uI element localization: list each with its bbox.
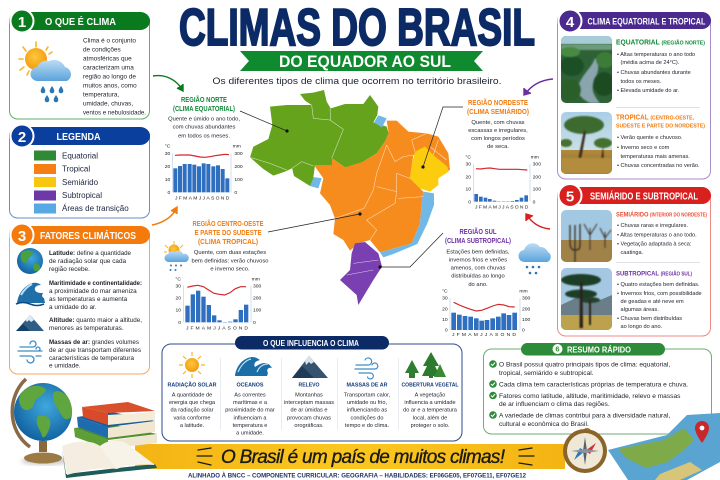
region: centro-oeste: e inverno seco. bbox=[210, 266, 250, 272]
chart: norte: 300 bbox=[234, 151, 243, 157]
checklist: de ar influenciam o clima das regiões. bbox=[499, 401, 610, 408]
column: massas de ar: Transportam calor, bbox=[344, 392, 391, 398]
region: sul bbox=[445, 227, 511, 288]
region: centro-oeste: (CLIMA TROPICAL) bbox=[198, 239, 258, 246]
column: oceanos: marítimas e a bbox=[233, 400, 268, 406]
region: norte: (CLIMA EQUATORIAL) bbox=[173, 106, 235, 113]
column: cobertura vegetal: influencia a umidade bbox=[404, 400, 456, 406]
icon: wave bbox=[16, 283, 45, 306]
panel 3: fatores climáticos: FATORES CLIMÁTICOS bbox=[40, 229, 136, 242]
chart: centro-oeste: 30 bbox=[175, 284, 181, 290]
region: sul: distribuídas ao longo bbox=[451, 274, 505, 280]
text: fatores: a proximidade do mar ameniza bbox=[49, 288, 137, 295]
chart: norte: 0 bbox=[168, 190, 171, 196]
chart: sul: °C bbox=[442, 289, 448, 295]
column: relevo: provocam chuvas bbox=[287, 415, 331, 421]
chart: norte: 10 bbox=[165, 177, 171, 183]
text: fatores: Maritimidade e continentalidade: bbox=[49, 280, 142, 287]
photo: caatinga bbox=[561, 210, 612, 262]
compass bbox=[563, 428, 607, 473]
chart: centro-oeste: mm bbox=[252, 276, 260, 282]
region: centro-oeste: E PARTE DO SUDESTE bbox=[194, 230, 262, 237]
text: equatorial: EQUATORIAL (REGIÃO NORTE) bbox=[616, 38, 705, 46]
chart: sul: 0 bbox=[445, 328, 448, 334]
chart: nordeste: 100 bbox=[533, 187, 541, 193]
panel 3: fatores climáticos: 3 bbox=[18, 228, 26, 245]
column: massas de ar bbox=[344, 358, 391, 429]
text: fatores: de radiação solar que cada bbox=[49, 258, 127, 265]
column: oceanos bbox=[225, 357, 275, 437]
photo: rainforest river bbox=[559, 36, 615, 103]
text: fatores: e umidade. bbox=[49, 362, 81, 370]
arrow: purple bbox=[524, 79, 553, 95]
chart: nordeste: mm bbox=[531, 154, 539, 160]
column: oceanos: influenciam a bbox=[234, 415, 267, 421]
region: norte: em todos os meses. bbox=[178, 133, 230, 139]
column: relevo: RELEVO bbox=[298, 382, 320, 388]
panel 1: o que é clima bbox=[10, 10, 150, 119]
chart: norte: mm bbox=[233, 143, 241, 149]
column: oceanos: temperatura e bbox=[233, 423, 267, 429]
text: tropical: SUDESTE E PARTE DO NORDESTE) bbox=[616, 123, 705, 129]
icon: sun and rain cloud bbox=[164, 241, 189, 271]
region: norte bbox=[168, 95, 240, 139]
text: fatores: Latitude: define a quantidade bbox=[49, 250, 131, 257]
region: sul: Estações bem definidas, bbox=[446, 250, 510, 256]
column: massas de ar: influenciando as bbox=[347, 408, 387, 414]
yellow banner bbox=[135, 444, 565, 469]
chart: nordeste bbox=[465, 154, 541, 211]
column: radiação solar bbox=[168, 352, 216, 429]
legend items: Tropical bbox=[62, 164, 90, 174]
panel: o que influencia o clima bbox=[162, 336, 462, 441]
panel 5: semiárido e subtropical bbox=[558, 184, 711, 336]
column: radiação solar: da radiação solar bbox=[171, 408, 214, 414]
panel 1: o que é clima: O QUE É CLIMA bbox=[45, 15, 116, 28]
text: equatorial: • Chuvas abundantes durante bbox=[617, 70, 691, 76]
arrow: orange bbox=[152, 207, 177, 225]
column: massas de ar: tempo e do clima. bbox=[345, 423, 390, 429]
text: subtropical: • Invernos frios, com possibilidade bbox=[617, 291, 702, 297]
column: relevo: de ar úmidas e bbox=[290, 408, 328, 414]
icon: rain cloud bbox=[518, 243, 551, 274]
text: subtropical: de geadas e até neve em bbox=[620, 299, 684, 305]
icon: wind bbox=[18, 341, 42, 363]
checklist: Cada clima tem características próprias de temperatura e chuva. bbox=[499, 382, 688, 388]
chart: centro-oeste: 0 bbox=[178, 320, 181, 326]
text: equatorial: todos os meses. bbox=[620, 79, 662, 85]
text: tropical: temperaturas mais amenas. bbox=[620, 154, 690, 160]
map illustration bbox=[608, 413, 720, 480]
legend items bbox=[34, 150, 129, 214]
text: tropical bbox=[616, 114, 705, 169]
text: fatores: as temperaturas e aumenta bbox=[49, 296, 128, 303]
region: nordeste: escassas e irregulares, bbox=[468, 128, 528, 134]
chart: centro-oeste: 100 bbox=[253, 308, 262, 314]
text: subtropical: algumas áreas. bbox=[620, 307, 659, 313]
chart: sul: 300 bbox=[522, 296, 531, 302]
chart: sul: 30 bbox=[442, 296, 448, 302]
legend items: Subtropical bbox=[62, 191, 102, 200]
region: sul: do ano. bbox=[468, 282, 488, 288]
text: definição de clima: atmosféricas que bbox=[83, 55, 132, 62]
subtitle ribbon: DO EQUADOR AO SUL bbox=[279, 52, 451, 71]
text: fatores: Altitude: quanto maior a altitude, bbox=[49, 317, 142, 324]
column: radiação solar: a latitude. bbox=[180, 423, 205, 429]
text: tropical: • Verão quente e chuvoso. bbox=[617, 135, 683, 141]
region: sul: (CLIMA SUBTROPICAL) bbox=[445, 238, 511, 245]
chart: nordeste: 0 bbox=[468, 199, 471, 205]
column: radiação solar: A quantidade de bbox=[172, 392, 212, 398]
column: relevo: interceptam massas bbox=[284, 400, 334, 406]
panel 5: semiárido e subtropical: 5 bbox=[566, 188, 574, 206]
chart: norte: 200 bbox=[234, 164, 243, 170]
text: fatores: características de temperatura bbox=[49, 355, 134, 362]
text: definição de clima: Clima é o conjunto bbox=[83, 37, 136, 44]
region: nordeste: Quente, com chuvas bbox=[471, 120, 525, 126]
legend items: Semiárido bbox=[62, 178, 99, 187]
text: definição de clima: muitos anos, como bbox=[83, 82, 137, 89]
column: oceanos: proximidade do mar bbox=[225, 408, 275, 414]
panel 6: resumo rápido: 6 bbox=[555, 345, 560, 354]
text: equatorial bbox=[616, 38, 705, 94]
chart: norte bbox=[165, 143, 243, 202]
region: nordeste: (CLIMA SEMIÁRIDO) bbox=[467, 107, 529, 116]
text: tropical: • Inverno seco e com bbox=[617, 145, 670, 151]
column: cobertura vegetal: do ar e a temperatura bbox=[403, 408, 458, 414]
text: definição de clima bbox=[83, 37, 146, 116]
column: cobertura vegetal bbox=[402, 352, 459, 429]
region: nordeste bbox=[467, 98, 529, 150]
region: nordeste: REGIÃO NORDESTE bbox=[468, 98, 528, 107]
text: semiárido: • Altas temperaturas o ano todo. bbox=[617, 232, 697, 238]
region: norte: REGIÃO NORTE bbox=[181, 95, 227, 104]
text: subtropical bbox=[616, 270, 702, 330]
panel 1: o que é clima: 1 bbox=[18, 14, 26, 31]
region: sul: REGIÃO SUL bbox=[460, 227, 497, 236]
chart: centro-oeste: 0 bbox=[253, 320, 256, 326]
checklist: A variedade de climas contribui para a diversidade natural, bbox=[499, 412, 670, 420]
checklist: Fatores como latitude, altitude, maritimidade, relevo e massas bbox=[499, 393, 681, 400]
subtitle text: Os diferentes tipos de clima que ocorrem no território brasileiro. bbox=[212, 76, 502, 86]
chart: nordeste: 0 bbox=[533, 199, 536, 205]
column: massas de ar: MASSAS DE AR bbox=[346, 382, 388, 388]
text: definição de clima: ventos e nebulosidade. bbox=[83, 109, 146, 116]
text: subtropical: ao longo do ano. bbox=[620, 324, 663, 330]
text: fatores: menores as temperaturas. bbox=[49, 325, 124, 332]
checklist: cultural e econômica do Brasil. bbox=[499, 421, 589, 428]
chart: sul: 200 bbox=[522, 306, 531, 312]
chart: sul: 0 bbox=[522, 328, 525, 334]
yellow banner: O Brasil é um país de muitos climas! bbox=[221, 447, 506, 468]
text: fatores: a umidade do ar. bbox=[49, 304, 97, 311]
region: nordeste: com longos períodos bbox=[471, 136, 525, 142]
icon: globe bbox=[17, 248, 43, 274]
panel 4: clima equatorial e tropical: 4 bbox=[566, 14, 575, 31]
chart: sul bbox=[442, 289, 531, 338]
chart: sul: 20 bbox=[442, 306, 448, 312]
chart: norte: °C bbox=[165, 143, 171, 149]
text: definição de clima: de condições bbox=[83, 46, 121, 53]
arrow: green bbox=[153, 76, 183, 91]
text: fatores: de ar que transportam diferentes bbox=[49, 347, 141, 354]
icon: sun, cloud and rain bbox=[19, 42, 71, 102]
chart: nordeste: 10 bbox=[465, 187, 471, 193]
open book bbox=[62, 441, 157, 478]
chart: nordeste: 300 bbox=[533, 162, 541, 168]
chart: centro-oeste: 300 bbox=[253, 284, 262, 290]
chart: norte: 100 bbox=[234, 177, 243, 183]
text: semiárido: • Chuvas raras e irregulares. bbox=[617, 223, 688, 229]
region: centro-oeste bbox=[191, 219, 269, 272]
photo: araucárias bbox=[561, 268, 612, 330]
text: equatorial: (média acima de 24°C). bbox=[620, 60, 680, 66]
region: centro-oeste: Quente, com duas estações bbox=[194, 250, 266, 256]
checklist: tropical, semiárido e subtropical. bbox=[499, 370, 594, 377]
region: sul: amenos, com chuvas bbox=[451, 266, 505, 272]
chart: centro-oeste: 20 bbox=[175, 296, 181, 302]
text: fatores: região recebe. bbox=[49, 266, 90, 273]
text: fatores: Massas de ar: grandes volumes bbox=[49, 339, 139, 346]
chart: centro-oeste bbox=[175, 276, 262, 331]
legend items: Áreas de transição bbox=[62, 204, 129, 213]
chart: centro-oeste: 10 bbox=[175, 308, 181, 314]
column: relevo bbox=[284, 356, 334, 429]
chart: sul: 10 bbox=[442, 317, 448, 323]
text: definição de clima: caracterizam uma bbox=[83, 64, 134, 71]
column: radiação solar: energia que chega bbox=[169, 400, 216, 406]
text: equatorial: • Elevada umidade do ar. bbox=[617, 88, 680, 94]
legend items: Equatorial bbox=[62, 152, 98, 160]
column: oceanos: As correntes bbox=[234, 392, 266, 398]
chart: norte: 30 bbox=[165, 151, 171, 157]
chart: centro-oeste: JFMAMJJASOND bbox=[186, 325, 248, 331]
photo: savanna bbox=[560, 112, 612, 174]
chart: sul: JFMAMJJASOND bbox=[452, 332, 516, 338]
arrow: red bbox=[526, 214, 550, 229]
panel: o que influencia o clima: O QUE INFLUENCIA O CLIMA bbox=[263, 339, 359, 348]
text: semiárido bbox=[616, 210, 707, 256]
panel 2: legenda bbox=[10, 124, 150, 218]
column: massas de ar: condições do bbox=[351, 415, 383, 421]
text: definição de clima: região ao longo de bbox=[83, 73, 136, 80]
panel 4: clima equatorial e tropical bbox=[558, 10, 711, 179]
icon: mountain bbox=[16, 315, 44, 331]
chart: sul: mm bbox=[519, 289, 528, 295]
text: definição de clima: umidade, chuvas, bbox=[83, 100, 133, 107]
column: cobertura vegetal: proteger o solo. bbox=[411, 423, 450, 429]
region: norte: Quente e úmido o ano todo, bbox=[168, 116, 240, 122]
map of Brazil bbox=[250, 90, 450, 305]
column: oceanos: OCEANOS bbox=[236, 382, 264, 388]
chart: nordeste: 200 bbox=[533, 174, 541, 180]
region: norte: com chuvas abundantes bbox=[173, 124, 236, 130]
region: nordeste: de seca. bbox=[487, 144, 509, 150]
panel 2: legenda: LEGENDA bbox=[56, 132, 100, 143]
chart: centro-oeste: 200 bbox=[253, 296, 262, 302]
text: semiárido: SEMIÁRIDO (INTERIOR DO NORDESTE) bbox=[616, 210, 707, 218]
chart: nordeste: 30 bbox=[465, 162, 471, 168]
checklist: O Brasil possui quatro principais tipos de clima: equatorial, bbox=[499, 361, 670, 368]
text: tropical: TROPICAL (CENTRO-OESTE, bbox=[616, 114, 694, 122]
text: subtropical: SUBTROPICAL (REGIÃO SUL) bbox=[616, 270, 692, 278]
chart: norte: JFMAMJJASOND bbox=[175, 196, 230, 202]
text: equatorial: • Altas temperaturas o ano todo bbox=[617, 52, 695, 58]
column: relevo: Montanhas bbox=[295, 392, 323, 398]
chart: norte: 0 bbox=[234, 190, 237, 196]
text: semiárido: • Vegetação adaptada à seca: bbox=[617, 242, 692, 248]
chart: nordeste: JFMAMJJASOND bbox=[475, 205, 529, 211]
text: fatores bbox=[49, 250, 142, 370]
column: cobertura vegetal: local, além de bbox=[413, 415, 447, 421]
column: cobertura vegetal: COBERTURA VEGETAL bbox=[402, 382, 459, 388]
books bbox=[74, 402, 157, 449]
chart: sul: 100 bbox=[522, 317, 531, 323]
chart: nordeste: 20 bbox=[465, 174, 471, 180]
chart: centro-oeste: °C bbox=[175, 276, 181, 282]
text: semiárido: caatinga. bbox=[620, 250, 644, 256]
column: relevo: orográficas. bbox=[294, 423, 324, 429]
chart: norte: 20 bbox=[165, 164, 171, 170]
text: definição de clima: temperatura, bbox=[83, 91, 119, 98]
panel 3: fatores climáticos bbox=[10, 224, 150, 374]
panel 6: resumo rápido: RESUMO RÁPIDO bbox=[567, 345, 631, 355]
checklist bbox=[489, 360, 688, 428]
column: radiação solar: RADIAÇÃO SOLAR bbox=[168, 381, 216, 388]
panel 6: resumo rápido bbox=[484, 343, 712, 434]
column: oceanos: a umidade. bbox=[236, 431, 264, 437]
title: CLIMAS DO BRASIL bbox=[179, 0, 535, 57]
footer: ALINHADO À BNCC – COMPONENTE CURRICULAR: GEOGRAFIA – HABILIDADES: EF06GE05, EF07GE11, EF07GE12 bbox=[188, 472, 527, 480]
globe bbox=[12, 379, 74, 465]
text: subtropical: • Quatro estações bem definidas. bbox=[617, 282, 700, 288]
region: sul: invernos frios e verões bbox=[449, 258, 507, 264]
chart: nordeste: °C bbox=[465, 154, 471, 160]
text: tropical: • Chuvas concentradas no verão. bbox=[617, 163, 700, 169]
region: centro-oeste: REGIÃO CENTRO-OESTE bbox=[192, 219, 264, 228]
text: subtropical: • Chuvas bem distribuídas bbox=[617, 316, 682, 322]
callout lines with dots bbox=[240, 107, 463, 269]
column: radiação solar: varia conforme bbox=[174, 415, 210, 421]
panel 2: legenda: 2 bbox=[18, 129, 26, 146]
region: centro-oeste: bem definidas: verão chuvoso bbox=[191, 258, 269, 264]
column: massas de ar: umidade ou frio, bbox=[347, 400, 387, 406]
column: cobertura vegetal: A vegetação bbox=[415, 392, 445, 398]
